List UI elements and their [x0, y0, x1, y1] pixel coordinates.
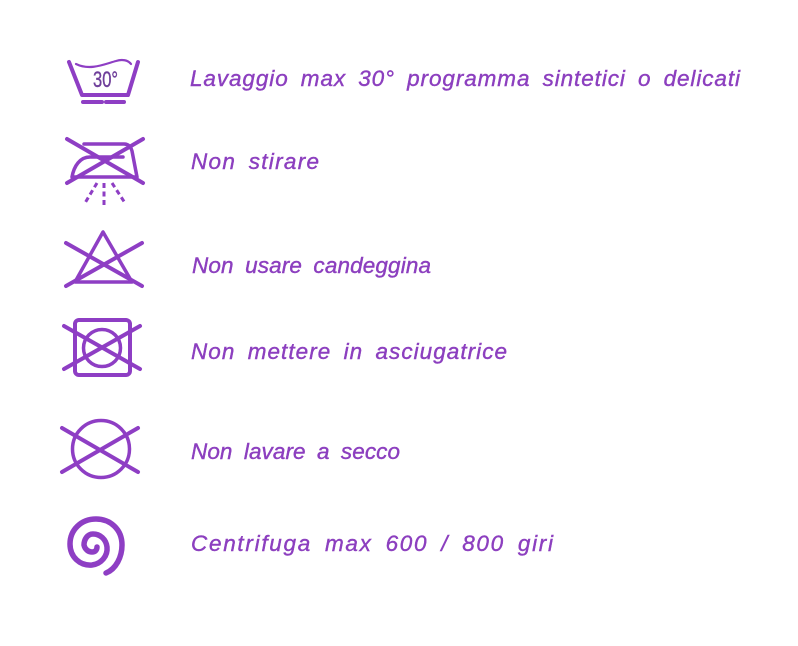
row: do not iron — [67, 139, 319, 205]
icon: crossed triangle — [66, 232, 142, 286]
label: bleach: Non usare candeggina — [192, 253, 431, 278]
row: spin — [70, 519, 554, 573]
label: wash: Lavaggio max 30° programma sintetici o delicati — [190, 66, 741, 91]
row: no tumble dry — [64, 320, 507, 375]
label: spin: Centrifuga max 600 / 800 giri — [191, 531, 554, 556]
icon: crossed square with circle — [64, 320, 140, 375]
row: no bleach — [66, 232, 431, 286]
icon: crossed iron — [67, 139, 143, 205]
icon: spiral — [70, 519, 122, 573]
row: wash at 30 degrees — [69, 60, 741, 102]
icon: wash tub 30 — [69, 60, 138, 102]
label: iron: Non stirare — [191, 149, 319, 174]
icon: wash tub 30: 30° — [93, 67, 118, 92]
icon: crossed circle — [62, 420, 138, 478]
label: dry clean: Non lavare a secco — [191, 439, 400, 464]
label: dryer: Non mettere in asciugatrice — [191, 339, 507, 364]
row: no dry cleaning — [62, 420, 400, 478]
